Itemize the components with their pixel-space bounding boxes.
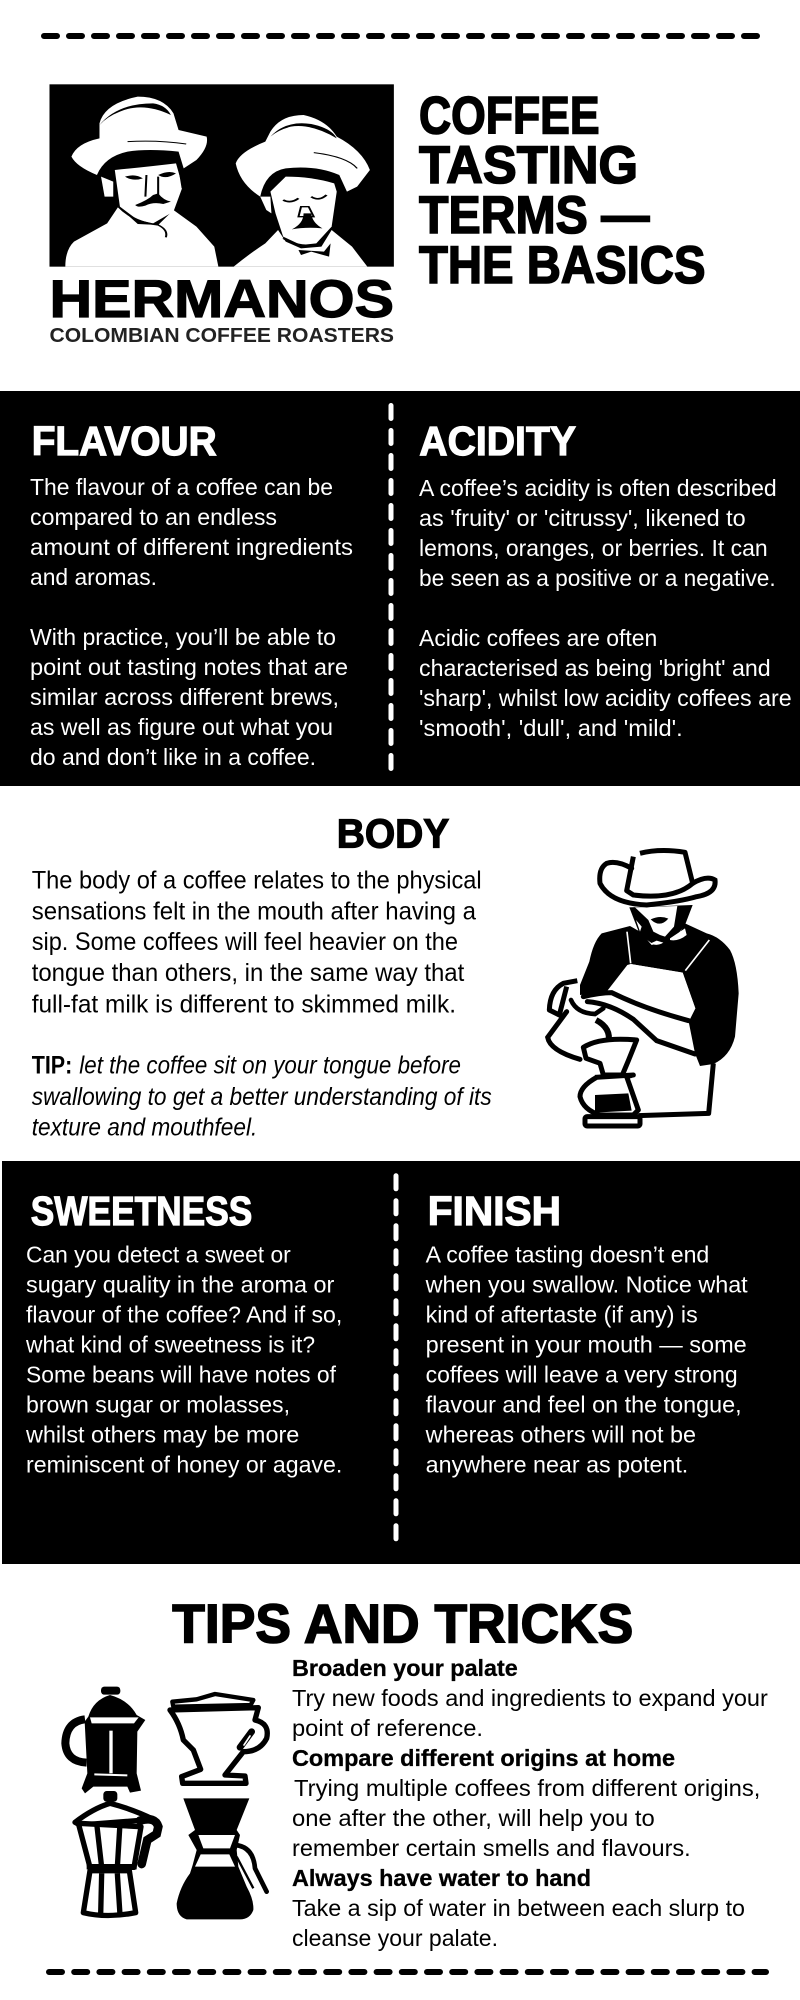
text: sweetness description: what kind of sweetness is it? <box>25 1332 315 1358</box>
text: sweetness description: reminiscent of honey or agave. <box>26 1452 342 1478</box>
text: tips list: Broaden your palate <box>292 1655 518 1681</box>
text: tips list: one after the other, will help you to <box>292 1805 655 1831</box>
text: flavour description: amount of different ingredients <box>30 534 353 560</box>
text: body description: full-fat milk is different to skimmed milk. <box>32 991 456 1018</box>
logo wordmark: HERMANOS <box>50 270 394 329</box>
icon: moka pot <box>75 1791 158 1915</box>
icon: pour-over dripper <box>170 1694 267 1783</box>
text: finish description: whereas others will not be <box>425 1422 696 1448</box>
text: sweetness description: Can you detect a sweet or <box>26 1242 291 1268</box>
text: body description: The body of a coffee relates to the physical <box>32 867 482 894</box>
text: tip <box>32 1053 492 1142</box>
text: tips list: remember certain smells and flavours. <box>292 1835 691 1861</box>
text: tips list: Try new foods and ingredients to expand your <box>292 1685 768 1711</box>
text: flavour description: as well as figure out what you <box>30 714 333 740</box>
text: flavour description: and aromas. <box>30 564 157 590</box>
text: tips list: cleanse your palate. <box>292 1925 498 1951</box>
text: acidity description: lemons, oranges, or berries. It can <box>419 535 768 561</box>
text: acidity description: be seen as a positive or a negative. <box>419 565 776 591</box>
text: finish description: coffees will leave a very strong <box>426 1362 738 1388</box>
logo illustration: two brothers in hats <box>49 84 394 267</box>
text: flavour description: compared to an endless <box>30 504 277 530</box>
text: acidity description: 'smooth', 'dull', and 'mild'. <box>419 715 683 741</box>
text: flavour description: The flavour of a coffee can be <box>30 474 333 500</box>
panel: body <box>32 811 739 1142</box>
text: body description: tongue than others, in the same way that <box>32 960 464 987</box>
heading: sweetness: SWEETNESS <box>31 1188 252 1234</box>
heading: finish: FINISH <box>428 1188 561 1234</box>
text: acidity description: A coffee’s acidity is often described <box>419 475 777 501</box>
text: body description: sip. Some coffees will feel heavier on the <box>32 929 458 956</box>
panel: sweetness and finish <box>2 1161 800 1564</box>
text: tip: texture and mouthfeel. <box>32 1115 257 1142</box>
text: finish description: anywhere near as potent. <box>426 1452 688 1478</box>
text: body description <box>32 867 482 1018</box>
icon: chemex <box>177 1798 267 1919</box>
text: tips list: Trying multiple coffees from different origins, <box>294 1775 760 1801</box>
title: COFFEE <box>419 86 600 146</box>
text: tip: swallowing to get a better understanding of its <box>32 1084 492 1111</box>
text: sweetness description: whilst others may be more <box>25 1422 299 1448</box>
heading: flavour: FLAVOUR <box>32 418 217 464</box>
text: flavour description: With practice, you’ll be able to <box>30 624 336 650</box>
text: acidity description: Acidic coffees are often <box>419 625 657 651</box>
icon: french press <box>65 1687 145 1793</box>
text: finish description: A coffee tasting doesn’t end <box>426 1242 709 1268</box>
text: sweetness description: Some beans will have notes of <box>26 1362 337 1388</box>
title: THE BASICS <box>419 236 706 295</box>
text: tips list <box>292 1655 768 1951</box>
text: acidity description: characterised as being 'bright' and <box>419 655 771 681</box>
text: tip: TIP: <box>32 1053 72 1080</box>
text: tips list: Take a sip of water in between each slurp to <box>292 1895 745 1921</box>
logo: Hermanos Colombian Coffee Roasters <box>49 84 394 347</box>
panel: flavour and acidity <box>0 391 800 786</box>
text: flavour description: do and don’t like in a coffee. <box>30 744 316 770</box>
text: tips list: point of reference. <box>292 1715 483 1741</box>
heading: body: BODY <box>337 811 449 857</box>
text: acidity description: 'sharp', whilst low acidity coffees are <box>419 685 792 711</box>
text: finish description: flavour and feel on the tongue, <box>426 1392 742 1418</box>
text: tip: let the coffee sit on your tongue before <box>79 1053 461 1080</box>
text: finish description: present in your mouth — some <box>426 1332 747 1358</box>
text: sweetness description <box>25 1242 342 1478</box>
text: finish description: when you swallow. Notice what <box>425 1272 748 1298</box>
icon: barista pouring coffee <box>548 851 739 1126</box>
title: TASTING <box>419 136 638 195</box>
text: tips list: Compare different origins at home <box>292 1745 675 1771</box>
text: sweetness description: sugary quality in the aroma or <box>26 1272 335 1298</box>
text: flavour description: point out tasting notes that are <box>30 654 348 680</box>
icons: coffee brewing equipment <box>65 1687 267 1919</box>
text: finish description: kind of aftertaste (if any) is <box>426 1302 698 1328</box>
text: acidity description: as 'fruity' or 'citrussy', likened to <box>419 505 746 531</box>
heading: acidity: ACIDITY <box>419 418 576 464</box>
title <box>419 86 706 295</box>
text: acidity description <box>419 475 792 741</box>
logo tagline: COLOMBIAN COFFEE ROASTERS <box>50 325 394 347</box>
text: flavour description: similar across different brews, <box>30 684 339 710</box>
text: sweetness description: brown sugar or molasses, <box>26 1392 290 1418</box>
panel: tips and tricks <box>65 1593 768 1951</box>
heading: tips and tricks: TIPS AND TRICKS <box>172 1593 633 1655</box>
text: sweetness description: flavour of the coffee? And if so, <box>26 1302 342 1328</box>
text: flavour description <box>30 474 353 770</box>
text: body description: sensations felt in the mouth after having a <box>32 898 476 925</box>
text: tips list: Always have water to hand <box>292 1865 591 1891</box>
title: TERMS — <box>419 186 650 245</box>
text: finish description <box>425 1242 748 1478</box>
